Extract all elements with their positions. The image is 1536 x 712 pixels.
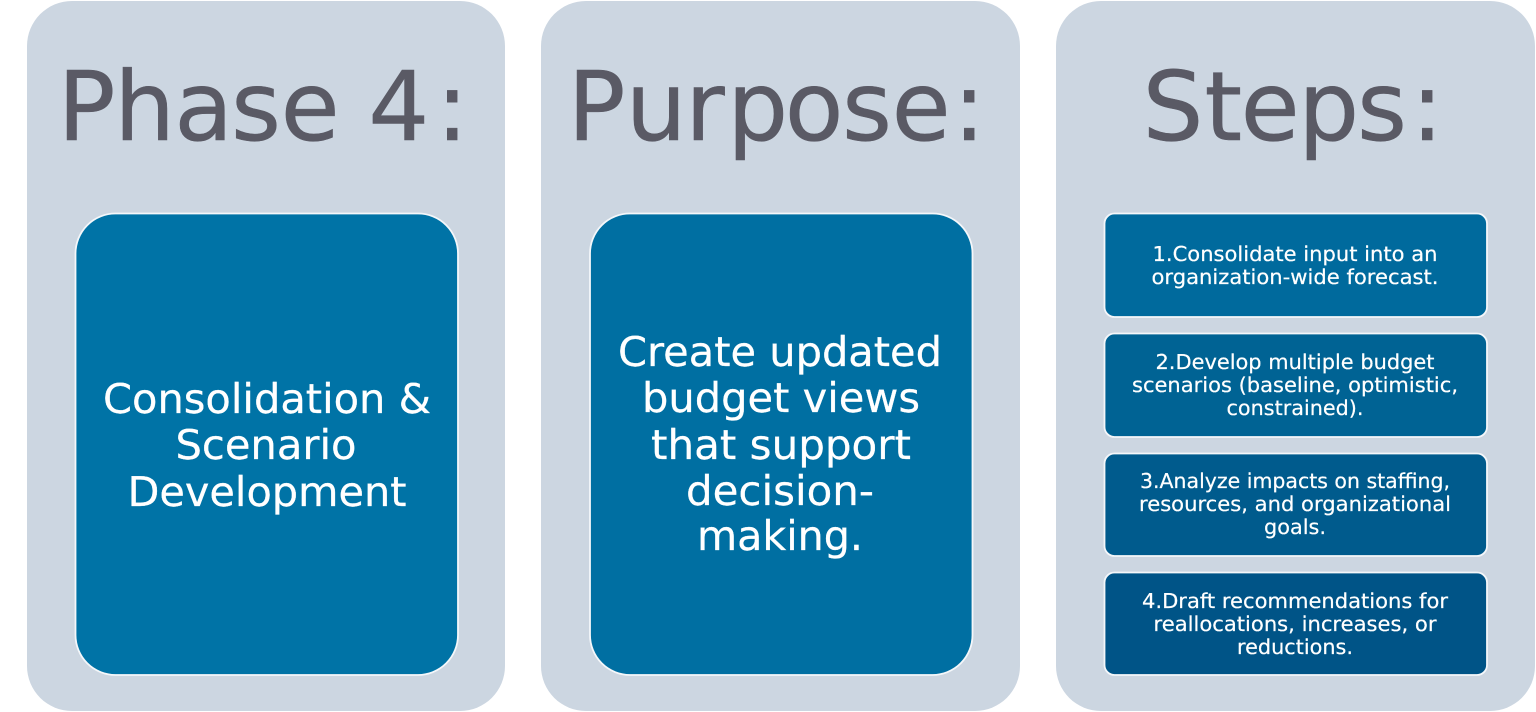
step 4: reallocations, increases, or xyxy=(1154,612,1437,636)
step 4: reductions. xyxy=(1237,635,1353,659)
card: purpose description: that support xyxy=(651,421,911,469)
step 2: constrained). xyxy=(1226,396,1364,420)
card: purpose description xyxy=(590,214,972,675)
step 3: 3.Analyze impacts on staffing, xyxy=(1140,469,1450,493)
card: phase name: Development xyxy=(128,468,406,516)
step 3: goals. xyxy=(1264,515,1326,539)
heading: Purpose: Purpose: xyxy=(568,51,985,163)
step 3: resources, and organizational xyxy=(1139,492,1451,516)
card: purpose description: budget views xyxy=(642,374,920,422)
card: purpose description: Create updated xyxy=(618,328,942,376)
step 2: scenarios (baseline, optimistic, xyxy=(1132,373,1458,397)
step 3 xyxy=(1104,454,1487,556)
panel: steps xyxy=(1056,1,1535,711)
step 1: organization-wide forecast. xyxy=(1152,265,1438,289)
panel: purpose xyxy=(541,1,1020,711)
step 2: 2.Develop multiple budget xyxy=(1156,350,1434,374)
panel: phase xyxy=(27,1,505,711)
heading: Phase 4: Phase 4: xyxy=(58,51,468,163)
card: phase name xyxy=(76,214,458,675)
step 1 xyxy=(1104,214,1487,317)
step 1: 1.Consolidate input into an xyxy=(1152,242,1438,266)
card: purpose description: making. xyxy=(697,512,863,560)
step 4: 4.Draft recommendations for xyxy=(1142,589,1449,613)
step 4 xyxy=(1104,572,1487,675)
heading: Steps: Steps: xyxy=(1142,51,1443,163)
card: purpose description: decision- xyxy=(686,467,874,515)
card: phase name: Scenario xyxy=(176,421,356,469)
step 2 xyxy=(1104,334,1487,437)
card: phase name: Consolidation & xyxy=(103,375,431,423)
